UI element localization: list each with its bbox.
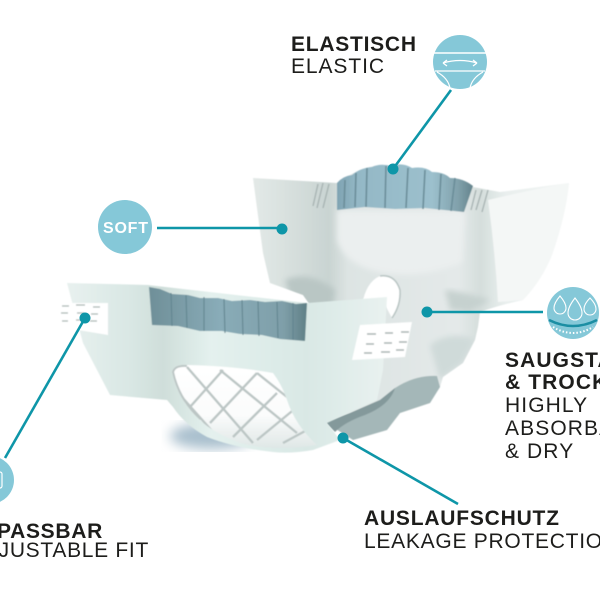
absorbent text: & DRY [505,440,574,463]
adjustable text [0,520,149,562]
absorbent text: HIGHLY [505,394,588,417]
callout: leakage protection [338,432,600,553]
elastic waistband, back [337,164,473,212]
icon: droplets [547,287,599,339]
leakage text [364,507,600,553]
absorbent lattice pad [172,365,317,448]
elastic text: ELASTIC [291,55,384,78]
front panel of diaper [60,283,412,453]
icon: soft badge: SOFT [103,220,148,237]
leg cut-out opening [362,276,400,318]
leader line [5,312,90,458]
elastic text: ELASTISCH [291,33,416,56]
leader line [338,432,458,504]
tape tab, right [352,322,412,360]
callout: soft [98,200,288,254]
elastic text [291,33,416,78]
back shading [284,194,522,378]
tape tab, left [60,303,108,335]
diaper illustration [60,164,569,453]
icon: waistband [433,35,487,89]
leader line [157,224,288,234]
leakage ruffle [325,376,440,440]
callout: adjustable fit [0,312,149,562]
back panel of diaper [253,164,569,440]
leader line [422,306,543,318]
ground shadow [170,423,254,449]
callout: absorbent [422,287,600,463]
absorbent text [505,349,600,463]
elastic waistband, front [149,287,307,341]
icon: soft badge [98,200,152,254]
callout: elastic [291,33,487,174]
leader line [388,90,451,174]
icon: adjustable [0,456,14,504]
leakage text: AUSLAUFSCHUTZ [364,507,559,530]
